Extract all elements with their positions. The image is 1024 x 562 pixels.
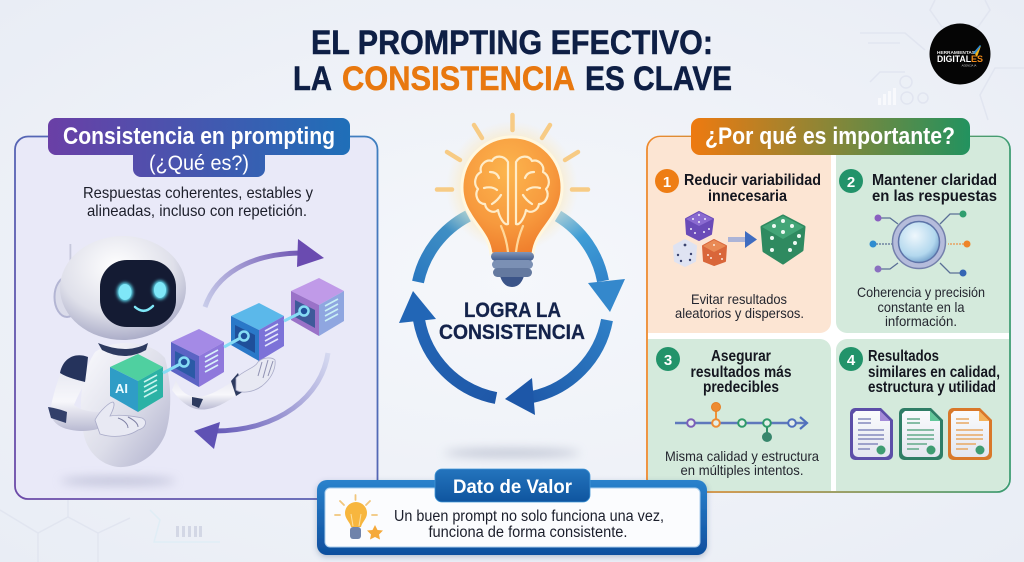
definition text: alineadas, incluso con repetición.	[87, 203, 307, 220]
icon: timeline	[675, 402, 807, 442]
cycle arrow: bottom right	[505, 320, 607, 415]
description 2	[857, 284, 985, 329]
cube 4	[291, 278, 344, 336]
title: CONSISTENCIA	[342, 60, 575, 98]
heading 3: resultados más	[690, 364, 792, 381]
robot body	[81, 343, 170, 467]
bulb base	[491, 252, 534, 287]
arrow: purple cycle top	[205, 239, 324, 307]
robot head	[60, 236, 186, 340]
icon: bulb with star	[335, 495, 383, 540]
card 4: resultados similares	[836, 339, 1009, 491]
description 3	[665, 448, 819, 478]
heading 3: predecibles	[703, 379, 779, 396]
logo: Herramientas Digitales: DIGITAL	[937, 54, 971, 65]
callout: dato de valor	[317, 469, 707, 555]
cube: AI	[110, 354, 163, 412]
center label: LOGRA LA	[464, 299, 561, 322]
heading 2: Mantener claridad	[872, 172, 997, 189]
card 2: mantener claridad	[836, 137, 1009, 333]
callout heading badge: Dato de Valor	[453, 476, 572, 498]
callout text: funciona de forma consistente.	[428, 524, 628, 541]
heading badge: consistencia en prompting: Consistencia en prompting	[63, 123, 335, 150]
panel: por que es importante	[647, 118, 1010, 492]
cube: AI: AI	[115, 381, 128, 396]
heading 3	[690, 348, 792, 396]
logo: Herramientas Digitales: HERRAMIENTAS	[937, 50, 975, 55]
heading 1	[684, 172, 821, 205]
heading badge: por que es importante: ¿Por qué es importante?	[705, 123, 955, 150]
description 1: aleatorios y dispersos.	[675, 305, 804, 321]
robot far hand	[236, 358, 275, 392]
card 3: asegurar resultados	[648, 339, 831, 491]
heading 4: Resultados	[868, 348, 939, 365]
icon: green document	[899, 408, 943, 460]
description 1	[675, 291, 804, 321]
cycle arrow: top left	[418, 216, 468, 282]
card 3: asegurar resultados: 3	[664, 352, 672, 369]
heading 4: estructura y utilidad	[868, 379, 996, 396]
logo: Herramientas Digitales	[930, 24, 990, 84]
heading 3: Asegurar	[711, 348, 771, 365]
title	[293, 24, 732, 98]
heading 4	[868, 348, 1000, 396]
heading badge: consistencia en prompting: (¿Qué es?)	[149, 152, 249, 175]
definition text	[83, 185, 313, 220]
cycle arrow: right	[558, 216, 625, 312]
robot shadow	[60, 477, 176, 485]
logo: Herramientas Digitales: AGENCIA IA	[962, 64, 977, 68]
heading badge: consistencia en prompting	[48, 118, 350, 177]
ground shadow	[444, 449, 580, 457]
callout text: Un buen prompt no solo funciona una vez,	[394, 508, 664, 525]
callout frame	[317, 480, 707, 555]
robot near arm	[48, 355, 100, 431]
description 3: Misma calidad y estructura	[665, 448, 819, 464]
icon: purple document	[850, 408, 893, 460]
heading 2: en las respuestas	[872, 188, 997, 205]
center label	[439, 299, 585, 344]
central diagram: cycle and bulb	[399, 115, 625, 457]
panel frame right	[647, 136, 1010, 492]
callout heading badge	[435, 469, 590, 502]
icon: magnifier network	[870, 210, 970, 276]
card 4: resultados similares: 4	[847, 352, 856, 369]
icon: dice	[674, 212, 804, 266]
bulb glow	[446, 121, 578, 253]
description 2: Coherencia y precisión	[857, 284, 985, 300]
small bars decoration bottom	[176, 526, 202, 537]
description 2: información.	[885, 313, 957, 329]
cube 3	[231, 303, 284, 361]
heading badge: por que es importante	[691, 118, 970, 155]
description 1: Evitar resultados	[691, 291, 787, 307]
callout text	[394, 508, 664, 541]
description 3: en múltiples intentos.	[680, 462, 804, 478]
heading 2	[872, 172, 997, 205]
light rays	[437, 115, 588, 190]
robot screen	[100, 260, 176, 327]
robot far arm	[172, 373, 244, 410]
signal bars decoration	[878, 88, 896, 105]
card 1: reducir variabilidad	[648, 137, 831, 333]
panel: consistencia en prompting	[15, 118, 378, 499]
icon: orange document	[948, 408, 992, 460]
card 1: reducir variabilidad: 1	[663, 174, 671, 191]
number 3	[656, 347, 680, 371]
robot near hand	[95, 402, 145, 436]
number 1	[655, 169, 679, 193]
robot face	[117, 280, 168, 311]
title: ES CLAVE	[585, 60, 732, 98]
number 4	[839, 347, 863, 371]
definition text: Respuestas coherentes, estables y	[83, 185, 313, 202]
brain icon	[475, 157, 549, 252]
title: LA	[293, 60, 332, 98]
number 2	[839, 169, 863, 193]
panel frame left	[15, 136, 378, 499]
heading 1: innecesaria	[708, 188, 787, 205]
center label: CONSISTENCIA	[439, 321, 585, 344]
cycle arrow: bottom left	[399, 291, 496, 398]
card 2: mantener claridad: 2	[847, 174, 855, 191]
robot ear	[54, 277, 80, 317]
heading 4: similares en calidad,	[868, 364, 1000, 381]
heading 1: Reducir variabilidad	[684, 172, 821, 189]
data connectors	[163, 306, 308, 373]
logo: Herramientas Digitales: ES	[971, 54, 983, 65]
robot	[48, 236, 244, 467]
arrow: purple cycle bottom	[194, 353, 328, 449]
cube 2	[171, 329, 224, 387]
bulb glass	[462, 137, 562, 254]
description 2: constante en la	[878, 299, 965, 315]
title: EL PROMPTING EFECTIVO:	[311, 24, 713, 62]
